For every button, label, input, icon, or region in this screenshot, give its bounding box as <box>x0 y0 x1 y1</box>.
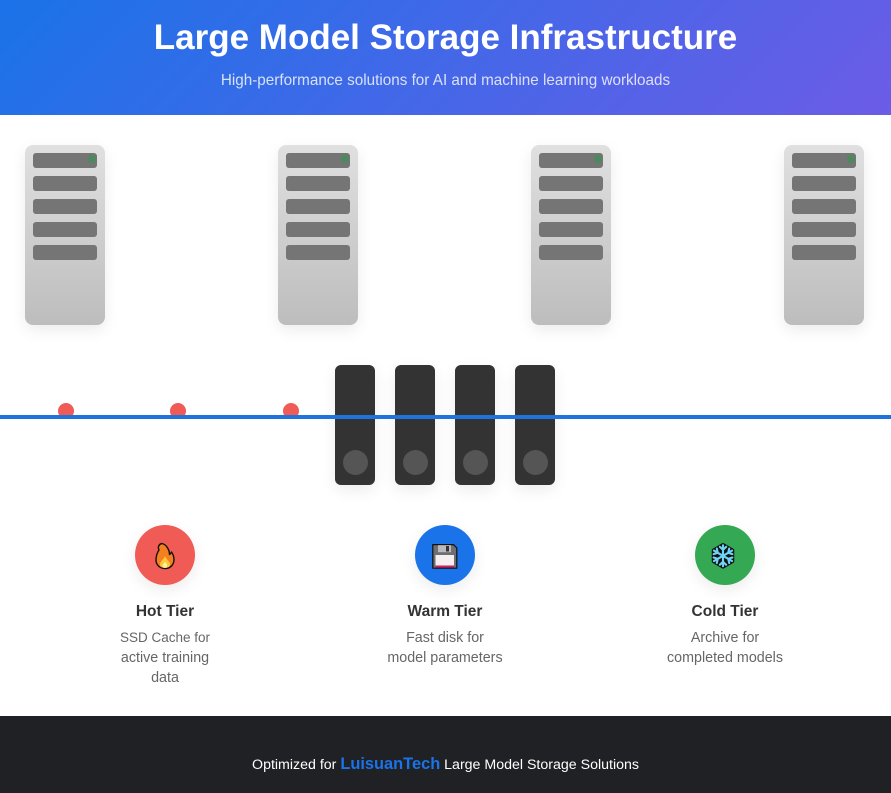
hot tier description <box>120 630 210 686</box>
disk drive 2 <box>395 365 435 485</box>
disk drive 1 <box>335 365 375 485</box>
warm tier name: Warm Tier <box>408 603 482 620</box>
hot tier name: Hot Tier <box>136 603 194 620</box>
hot tier description: data <box>151 670 179 686</box>
server rack 3 <box>531 145 611 325</box>
data packet 1 <box>58 403 74 419</box>
cold tier <box>667 525 783 666</box>
icon: fire <box>135 525 195 585</box>
hot tier description: active training <box>121 650 209 666</box>
footer text: Optimized for LuisuanTech Large Model Storage Solutions <box>252 755 639 773</box>
cold tier description: Archive for <box>691 630 759 646</box>
warm tier description: model parameters <box>387 650 503 666</box>
header banner <box>0 0 891 115</box>
hot tier description: SSD Cache for <box>120 630 210 644</box>
server rack 4 <box>784 145 864 325</box>
data packet 2 <box>170 403 186 419</box>
disk drive 3 <box>455 365 495 485</box>
warm tier <box>387 525 503 666</box>
warm tier description: Fast disk for <box>406 630 484 646</box>
icon: floppy disk <box>415 525 475 585</box>
cold tier description: completed models <box>667 650 783 666</box>
server rack 2 <box>278 145 358 325</box>
warm tier description <box>387 630 503 666</box>
hot tier <box>120 525 210 686</box>
disk drive 4 <box>515 365 555 485</box>
footer <box>0 716 891 793</box>
title: Large Model Storage Infrastructure <box>154 18 737 57</box>
icon: snowflake <box>695 525 755 585</box>
server rack 1 <box>25 145 105 325</box>
data flow line <box>0 415 891 419</box>
subtitle: High-performance solutions for AI and machine learning workloads <box>221 72 670 89</box>
cold tier name: Cold Tier <box>692 603 758 620</box>
cold tier description <box>667 630 783 666</box>
data packet 3 <box>283 403 299 419</box>
